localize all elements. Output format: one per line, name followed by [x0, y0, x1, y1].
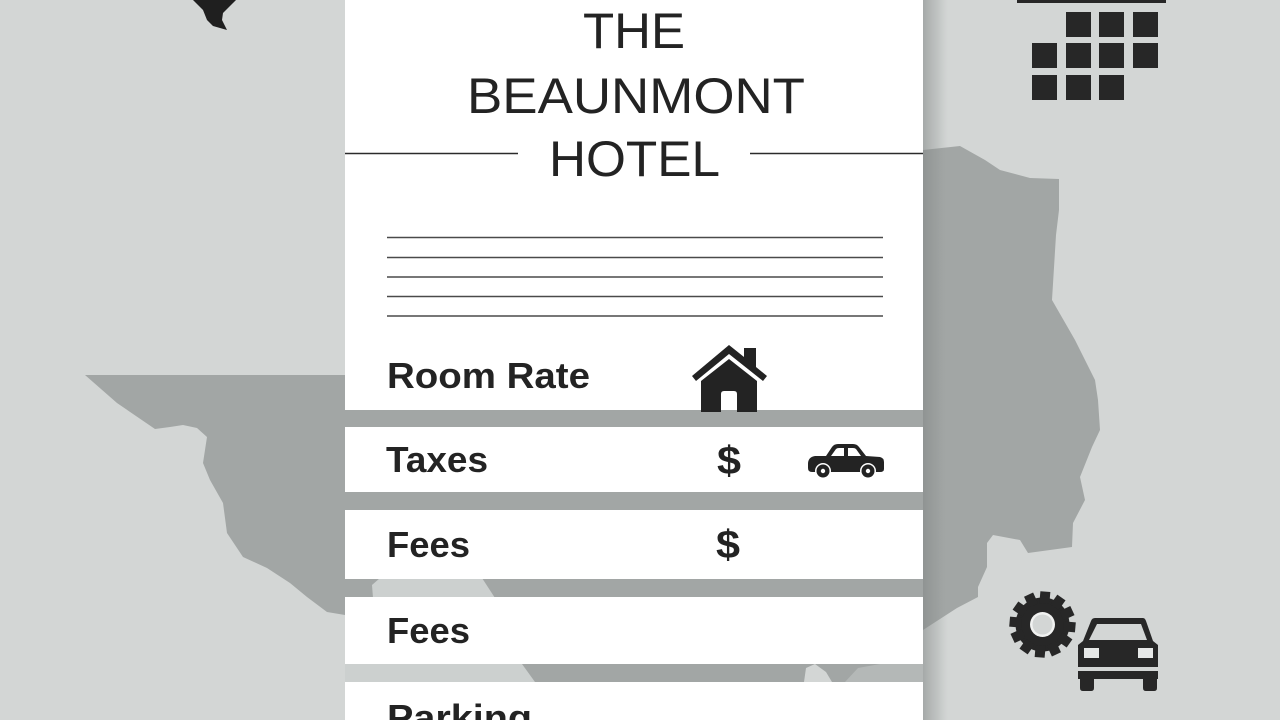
title rule — [345, 152, 923, 154]
icon: house — [692, 345, 767, 412]
row: room rate: Room Rate — [387, 355, 590, 396]
row: fees second: Fees — [387, 610, 470, 651]
map: right landmass — [900, 146, 1100, 640]
row: parking — [345, 682, 923, 720]
row: taxes: Taxes — [386, 439, 488, 480]
icon: dollar sign: $ — [716, 523, 740, 567]
icon: side view car — [808, 444, 884, 479]
title: HOTEL — [549, 131, 720, 187]
title: THE — [583, 3, 685, 59]
icon: front view car — [1078, 618, 1158, 691]
card shadow — [923, 0, 948, 720]
icon: dollar sign: $ — [717, 439, 741, 483]
panel: hotel bill card — [345, 0, 923, 720]
placeholder text lines — [387, 238, 883, 316]
card header section — [345, 0, 923, 410]
row: fees second — [345, 597, 923, 664]
map: left landmass — [85, 375, 345, 615]
icon: dark shape at top left — [193, 0, 236, 30]
title: BEAUNMONT — [467, 68, 805, 124]
row: fees: Fees — [387, 524, 470, 565]
icon: gear — [1009, 591, 1076, 658]
row: fees — [345, 510, 923, 579]
map: band visible behind the card — [345, 405, 923, 690]
title — [467, 3, 805, 187]
row: taxes — [345, 427, 923, 492]
icon: calendar — [1017, 0, 1166, 100]
